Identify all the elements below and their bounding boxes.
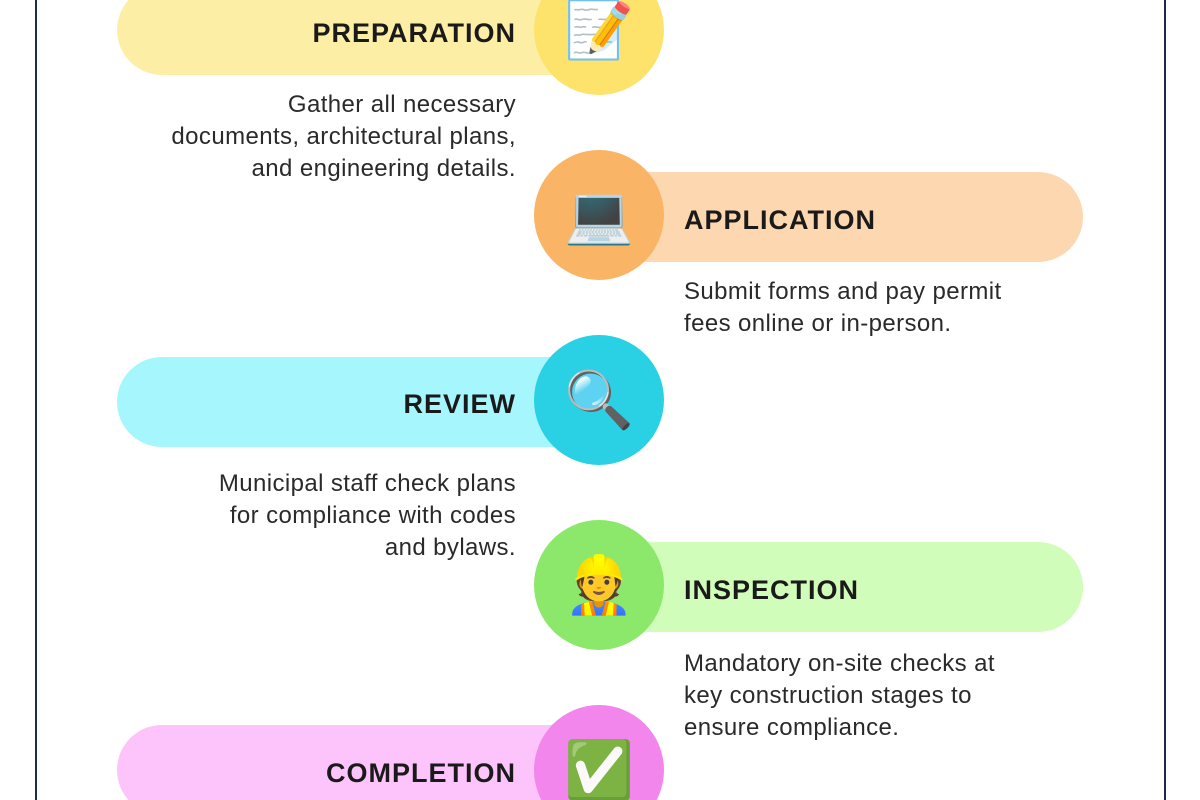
icon: magnifier bbox=[534, 335, 664, 465]
icon: laptop: 💻 bbox=[564, 183, 634, 246]
text: review: and bylaws. bbox=[385, 534, 516, 561]
heading: application: APPLICATION bbox=[684, 205, 876, 235]
icon: laptop bbox=[534, 150, 664, 280]
step: application bbox=[534, 150, 1083, 337]
step: completion bbox=[117, 705, 664, 800]
icon: magnifier: 🔍 bbox=[564, 368, 634, 431]
text: application bbox=[684, 278, 1002, 337]
step: inspection bbox=[534, 520, 1083, 741]
icon: construction worker bbox=[534, 520, 664, 650]
pill: preparation bbox=[117, 0, 600, 75]
pill: inspection bbox=[600, 542, 1083, 632]
text: application: Submit forms and pay permit bbox=[684, 278, 1002, 305]
step: review bbox=[117, 335, 664, 561]
heading: review: REVIEW bbox=[403, 389, 516, 419]
icon: check mark: ✅ bbox=[564, 738, 634, 800]
step: preparation bbox=[117, 0, 664, 182]
text: review bbox=[219, 470, 516, 561]
text: preparation: and engineering details. bbox=[252, 155, 516, 182]
text: preparation: documents, architectural plans, bbox=[171, 123, 516, 150]
heading: completion: COMPLETION bbox=[326, 758, 516, 788]
text: preparation bbox=[171, 91, 516, 182]
icon: construction worker: 👷 bbox=[564, 553, 634, 616]
text: review: Municipal staff check plans bbox=[219, 470, 516, 497]
frame bbox=[35, 0, 37, 800]
heading: preparation: PREPARATION bbox=[312, 18, 516, 48]
text: preparation: Gather all necessary bbox=[288, 91, 516, 118]
text: inspection bbox=[684, 650, 995, 741]
heading: inspection: INSPECTION bbox=[684, 575, 859, 605]
icon: memo bbox=[534, 0, 664, 95]
text: review: for compliance with codes bbox=[230, 502, 516, 529]
text: application: fees online or in-person. bbox=[684, 310, 951, 337]
pill: review bbox=[117, 357, 600, 447]
icon: check mark bbox=[534, 705, 664, 800]
text: inspection: key construction stages to bbox=[684, 682, 972, 709]
pill: completion bbox=[117, 725, 600, 800]
text: inspection: ensure compliance. bbox=[684, 714, 899, 741]
pill: application bbox=[600, 172, 1083, 262]
text: inspection: Mandatory on-site checks at bbox=[684, 650, 995, 677]
